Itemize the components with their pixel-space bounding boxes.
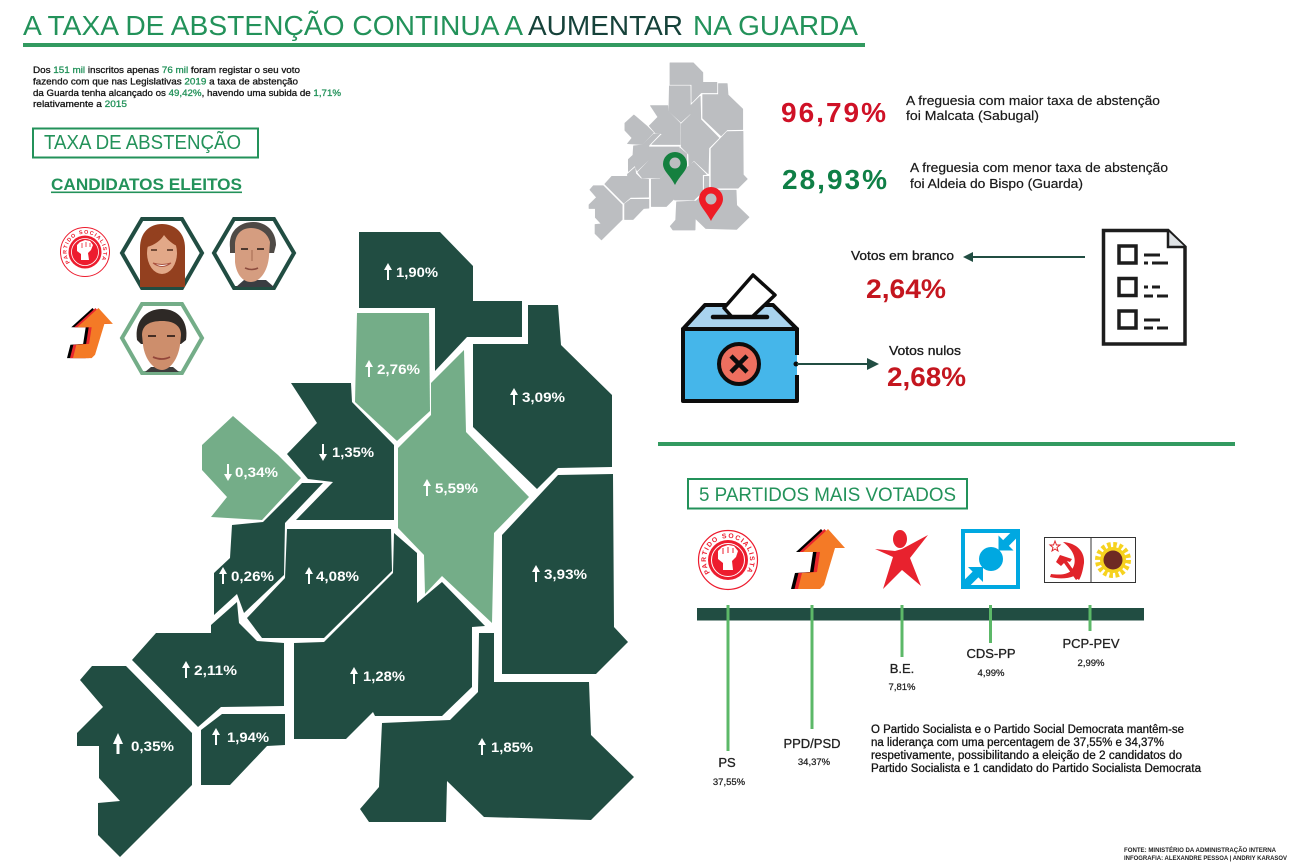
label: 2,76%: 2,76% — [377, 361, 421, 377]
logo: Partido Socialista (candidates) — [60, 227, 110, 277]
intro text: da Guarda tenha alcançado os 49,42%, havendo uma subida de 1,71% — [33, 88, 342, 99]
label: 4,08%: 4,08% — [316, 568, 360, 584]
label: 1,90% — [384, 263, 439, 280]
stat: votos em branco — [851, 249, 954, 304]
party: PCP-PEV: PCP-PEV — [1062, 636, 1120, 651]
municipality: 1,90% — [359, 232, 522, 371]
label: 0,34%: 0,34% — [235, 464, 279, 480]
logo: PPD/PSD — [791, 529, 845, 589]
text block: leadership analysis: respetivamente, possibilitando a eleição de 2 candidatos do — [871, 750, 1182, 762]
party: PS: 37,55% — [713, 777, 746, 788]
candidate photo: man PSD — [122, 304, 202, 373]
municipality: 4,08% — [247, 529, 392, 638]
stat: votos nulos: Votos nulos — [889, 344, 961, 358]
intro text — [33, 65, 342, 110]
logo: Partido Socialista (candidates): PARTIDO SOCIALISTA — [62, 230, 108, 264]
heading: taxa de abstenção: TAXA DE ABSTENÇÃO — [44, 130, 241, 154]
label: 0,26%: 0,26% — [231, 568, 275, 584]
icon: green map pin — [663, 152, 687, 185]
label: 3,93% — [532, 565, 588, 582]
label: 3,09% — [510, 388, 566, 405]
logo: Bloco de Esquerda — [875, 530, 928, 589]
text block: leadership analysis: na liderança com uma percentagem de 37,55% e 34,37% — [871, 737, 1164, 749]
party: B.E.: 7,81% — [889, 682, 916, 693]
text block: leadership analysis: Partido Socialista e 1 candidato do Partido Socialista Democrata — [871, 763, 1202, 775]
label: 1,28%: 1,28% — [363, 668, 406, 684]
icon: ballot paper document — [1104, 230, 1185, 344]
candidate photo: man — [214, 219, 294, 288]
party: PS: PS — [718, 755, 736, 770]
intro text: fazendo com que nas Legislativas 2019 a taxa de abstenção — [33, 76, 298, 88]
label: 0,35% — [113, 733, 175, 754]
municipality: 0,34% — [202, 416, 301, 520]
label: 2,11% — [182, 661, 238, 678]
label: 2,76% — [365, 360, 421, 377]
label: 3,09%: 3,09% — [522, 389, 566, 405]
section divider — [658, 442, 1235, 446]
label: 5,59% — [423, 479, 479, 496]
municipality: 3,93% — [502, 474, 628, 674]
label: 1,94% — [212, 728, 270, 745]
candidate photo: woman — [122, 219, 202, 288]
municipality: 5,59% — [398, 350, 529, 623]
logo: PPD/PSD (candidates) — [67, 308, 113, 358]
icon: red map pin — [699, 187, 723, 221]
timeline bar — [697, 608, 1144, 620]
intro text: relativamente a 2015 — [33, 99, 127, 110]
stat: maior abstenção: foi Malcata (Sabugal) — [906, 108, 1039, 123]
party: PCP-PEV — [1062, 605, 1120, 669]
label: 1,35%: 1,35% — [332, 444, 375, 460]
title — [23, 10, 865, 47]
municipality: 1,28% — [294, 533, 485, 739]
municipality: 2,76% — [355, 313, 430, 441]
municipality: 1,85% — [360, 633, 634, 822]
label: 3,93%: 3,93% — [544, 566, 588, 582]
label: 0,35%: 0,35% — [131, 738, 175, 754]
party: PCP-PEV: 2,99% — [1078, 658, 1105, 669]
icon: ballot box — [683, 275, 797, 401]
stat: menor abstenção: 28,93% — [782, 164, 887, 195]
party: B.E.: B.E. — [890, 661, 914, 676]
heading: 5 partidos mais votados: 5 PARTIDOS MAIS VOTADOS — [699, 484, 956, 506]
source credits: FONTE: MINISTÉRIO DA ADMINISTRAÇÃO INTERNA — [1124, 845, 1276, 854]
source credits — [1124, 845, 1288, 862]
label: 4,08% — [305, 567, 360, 584]
party: CDS-PP — [966, 605, 1016, 679]
stat: maior abstenção: 96,79% — [781, 97, 886, 128]
party: CDS-PP: CDS-PP — [966, 646, 1016, 661]
party: PPD/PSD: 34,37% — [798, 757, 831, 768]
logo: Partido Socialista: PARTIDO SOCIALISTA — [701, 533, 755, 575]
label: 1,85% — [478, 738, 534, 755]
municipality: 0,35% — [77, 666, 192, 857]
label: 1,35% — [319, 444, 375, 461]
label: 1,85%: 1,85% — [491, 739, 534, 755]
intro text: Dos 151 mil inscritos apenas 76 mil foram registar o seu voto — [33, 65, 300, 76]
party: PPD/PSD: PPD/PSD — [783, 736, 841, 751]
title: NA GUARDA — [693, 10, 858, 41]
municipality: 2,11% — [132, 602, 284, 727]
label: 1,28% — [350, 667, 406, 684]
logo: CDS-PP — [961, 529, 1020, 589]
stat: menor abstenção — [782, 160, 1168, 195]
text block: leadership analysis — [871, 724, 1202, 775]
label: 2,11%: 2,11% — [194, 662, 238, 678]
party: PS — [713, 605, 746, 788]
municipality: 1,35% — [287, 383, 394, 520]
stat: menor abstenção: foi Aldeia do Bispo (Guarda) — [910, 176, 1083, 191]
heading: candidatos eleitos: CANDIDATOS ELEITOS — [51, 175, 242, 194]
text block: leadership analysis: O Partido Socialista e o Partido Social Democrata mantêm-se — [871, 724, 1184, 736]
municipality: 1,94% — [201, 714, 285, 785]
arrow: votos nulos — [794, 358, 879, 370]
logo: Partido Socialista — [698, 530, 758, 590]
title: A TAXA DE ABSTENÇÃO CONTINUA A — [23, 10, 523, 41]
map: abstention by municipality — [77, 232, 634, 857]
small locator map — [589, 63, 749, 240]
title: AUMENTAR — [528, 10, 683, 41]
party: B.E. — [889, 605, 916, 693]
logo: PCP-PEV — [1044, 537, 1136, 582]
stat: votos nulos — [887, 344, 966, 392]
party: CDS-PP: 4,99% — [978, 668, 1005, 679]
arrow: votos em branco — [963, 252, 1085, 262]
party: PPD/PSD — [783, 605, 841, 768]
stat: menor abstenção: A freguesia com menor taxa de abstenção — [910, 160, 1168, 175]
label: 0,26% — [219, 567, 275, 584]
municipality: 0,26% — [214, 483, 323, 615]
stat: votos em branco: Votos em branco — [851, 249, 954, 263]
label: 1,94%: 1,94% — [227, 729, 270, 745]
municipality: 3,09% — [473, 305, 612, 489]
stat: votos em branco: 2,64% — [866, 274, 946, 304]
label: 5,59%: 5,59% — [435, 480, 479, 496]
label: 0,34% — [224, 464, 279, 481]
stat: votos nulos: 2,68% — [887, 362, 966, 392]
stat: maior abstenção: A freguesia com maior taxa de abstenção — [906, 93, 1160, 108]
label: 1,90%: 1,90% — [396, 264, 439, 280]
stat: maior abstenção — [781, 93, 1160, 128]
